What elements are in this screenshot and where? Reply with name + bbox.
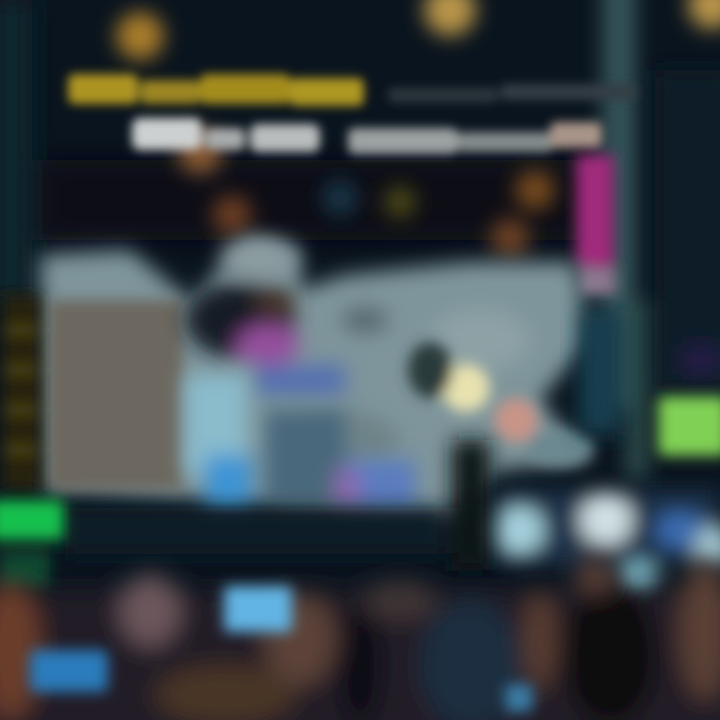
beige panel [48, 300, 183, 490]
pink banner [576, 155, 616, 296]
world map wall [40, 240, 590, 520]
spotlights [408, 342, 594, 466]
green sign right [658, 396, 720, 456]
left ladder [2, 295, 40, 490]
right dark panel [655, 70, 720, 390]
right teal figure [578, 310, 622, 435]
audience crowd [0, 557, 720, 720]
green sign left [0, 500, 64, 590]
blue figures [185, 375, 415, 510]
vertical pillar [602, 0, 649, 480]
white lights right [495, 490, 720, 600]
left wall [0, 0, 580, 300]
title line 1 [68, 74, 636, 106]
dark stage band [65, 440, 490, 570]
central presenter [185, 238, 345, 395]
ceiling lights [116, 0, 720, 258]
audience phone screens [30, 586, 533, 712]
title line 2 [132, 118, 602, 154]
